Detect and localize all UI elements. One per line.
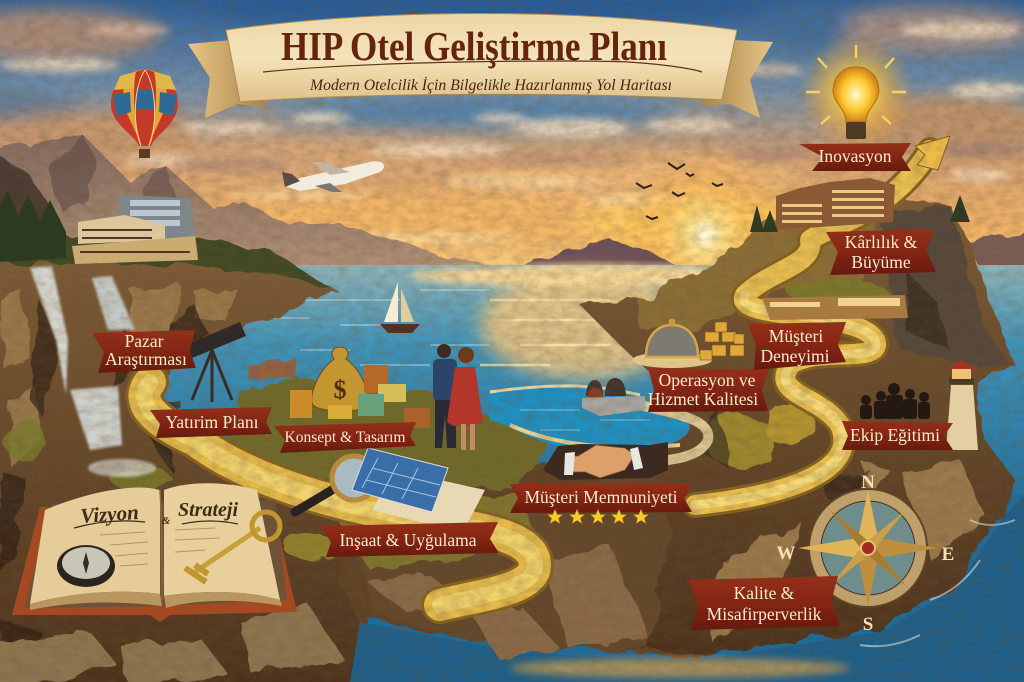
icon: blueprint and papers xyxy=(352,448,485,528)
banner: title scroll xyxy=(188,14,773,118)
road: lower left winding path xyxy=(144,382,535,605)
icon: birds xyxy=(636,163,723,219)
icon: compass rose xyxy=(776,472,954,635)
label: Müşteri Deneyimi: Müşteri xyxy=(769,326,823,346)
label: Kârlılık & Büyüme xyxy=(826,229,936,275)
label: Müşteri Memnuniyeti: Müşteri Memnuniyeti xyxy=(524,487,678,507)
label: Inşaat & Uyğulama: Inşaat & Uyğulama xyxy=(339,530,477,550)
banner subtitle: Modern Otelcilik İçin Bilgelikle Hazırlanmış Yol Haritası xyxy=(309,76,672,94)
icon: lighthouse xyxy=(946,360,978,450)
label: Müşteri Deneyimi: Deneyimi xyxy=(760,346,830,366)
banner title: HIP Otel Geliştirme Planı xyxy=(281,23,667,69)
label: Konsept & Tasarım: Konsept & Tasarım xyxy=(285,429,405,446)
label: Operasyon ve Hizmet Kalitesi: Operasyon ve xyxy=(659,370,756,390)
label: Operasyon ve Hizmet Kalitesi: Hizmet Kalitesi xyxy=(648,389,758,409)
icon: hot air balloon xyxy=(111,70,178,158)
label: Kârlılık & Büyüme: Büyüme xyxy=(851,252,911,272)
icon: couple at viewpoint xyxy=(433,344,483,450)
label: Pazar Araştırması: Araştırması xyxy=(105,349,187,369)
label: Ekip Eğitimi: Ekip Eğitimi xyxy=(850,425,940,445)
background: sea xyxy=(0,265,1024,682)
background: sky xyxy=(0,0,1024,320)
golden key xyxy=(185,512,280,582)
icon: money bag and coin stacks xyxy=(290,347,430,428)
label: Inovasyon: Inovasyon xyxy=(819,146,892,166)
label: Pazar Araştırması xyxy=(92,330,196,373)
icon: team silhouettes xyxy=(860,383,930,419)
label: Müşteri Memnuniyeti xyxy=(510,483,692,524)
pocket compass xyxy=(57,545,115,587)
icon: mid right resort xyxy=(762,295,908,320)
icon: magnifying glass xyxy=(295,456,376,512)
left cliff xyxy=(0,230,390,682)
icon: telescope xyxy=(186,322,246,402)
label: Kalite & Misafirperverlik: Kalite & xyxy=(734,583,795,603)
road: right winding path with arrow xyxy=(695,136,950,505)
rating stars xyxy=(547,509,649,524)
waterfalls xyxy=(30,266,156,477)
icon: lower infinity pool xyxy=(490,378,708,462)
land under money and couple xyxy=(230,380,550,488)
icon: money bag and coin stacks: $ xyxy=(334,375,346,404)
center foreground rocks and bottom sea xyxy=(330,470,1024,682)
icon: open book with compass and key: & xyxy=(162,515,171,527)
label: Kârlılık & Büyüme: Kârlılık & xyxy=(845,232,918,252)
icon: handshake xyxy=(543,442,668,480)
background: distant mountains xyxy=(0,132,1024,278)
icon: compass rose: N xyxy=(861,472,875,493)
icon: open book with compass and key: Strateji xyxy=(178,499,238,521)
icon: open book with compass and key: Vizyon xyxy=(80,500,139,528)
icon: left hotel xyxy=(0,190,198,264)
ground base behind foreground rocks xyxy=(290,460,700,682)
icon: compass rose: W xyxy=(776,543,796,564)
label: Kalite & Misafirperverlik: Misafirperverlik xyxy=(707,604,822,624)
icon: compass rose: S xyxy=(863,614,873,635)
icon: airplane xyxy=(282,161,384,192)
right cliff xyxy=(580,200,1015,655)
label: Operasyon ve Hizmet Kalitesi xyxy=(648,368,768,412)
label: Müşteri Deneyimi xyxy=(748,322,846,370)
label: Inovasyon xyxy=(799,143,911,171)
icon: sailboat xyxy=(380,282,420,333)
label: Yatırim Planı xyxy=(150,407,272,438)
icon: service bell and gold blocks xyxy=(632,318,744,368)
banner tails xyxy=(188,40,773,118)
label: Konsept & Tasarım xyxy=(274,422,416,453)
label: Pazar Araştırması: Pazar xyxy=(125,331,164,351)
banner main ribbon xyxy=(226,14,737,102)
label: Ekip Eğitimi xyxy=(842,421,953,450)
icon: open book with compass and key xyxy=(12,483,297,622)
label: Kalite & Misafirperverlik xyxy=(688,576,840,630)
icon: compass rose: E xyxy=(942,544,954,565)
icon: upper right hotel xyxy=(750,178,970,232)
label: Yatırim Planı: Yatırim Planı xyxy=(165,412,259,432)
label: Inşaat & Uyğulama xyxy=(320,522,499,557)
icon: lightbulb xyxy=(798,34,914,150)
